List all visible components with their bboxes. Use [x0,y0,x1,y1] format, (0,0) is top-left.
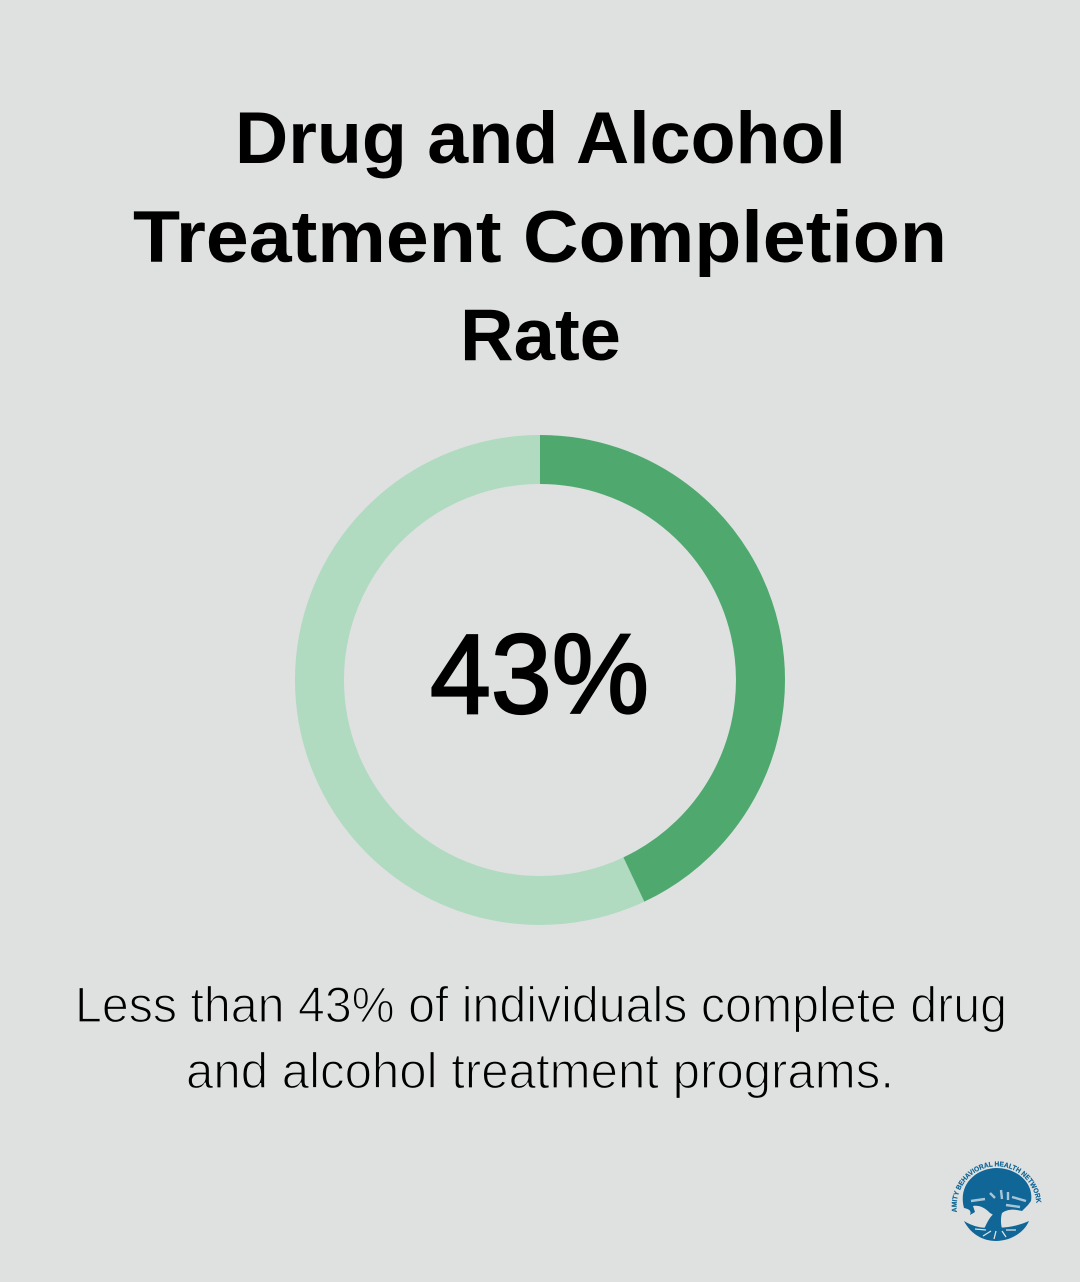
center value: 43% [430,611,649,737]
logo root lines [975,1229,1016,1239]
donut chart: 43% completion [320,460,760,900]
logo tree canopy [963,1168,1031,1217]
description text: and alcohol treatment programs. [186,1043,894,1099]
logo tree trunk [984,1208,1004,1229]
title [133,98,947,376]
donut track [320,460,760,900]
donut value segment [540,460,760,880]
description text: Less than 43% of individuals complete drug [75,977,1007,1033]
description text [75,977,1007,1099]
logo: Amity Behavioral Health Network [952,1161,1042,1241]
title: Drug and Alcohol [235,98,846,179]
logo tree highlights [971,1190,1026,1207]
logo curved name: AMITY BEHAVIORAL HEALTH NETWORK [952,1161,1042,1212]
title: Rate [460,295,621,376]
logo roots bowl [964,1221,1029,1241]
title: Treatment Completion [133,197,947,278]
